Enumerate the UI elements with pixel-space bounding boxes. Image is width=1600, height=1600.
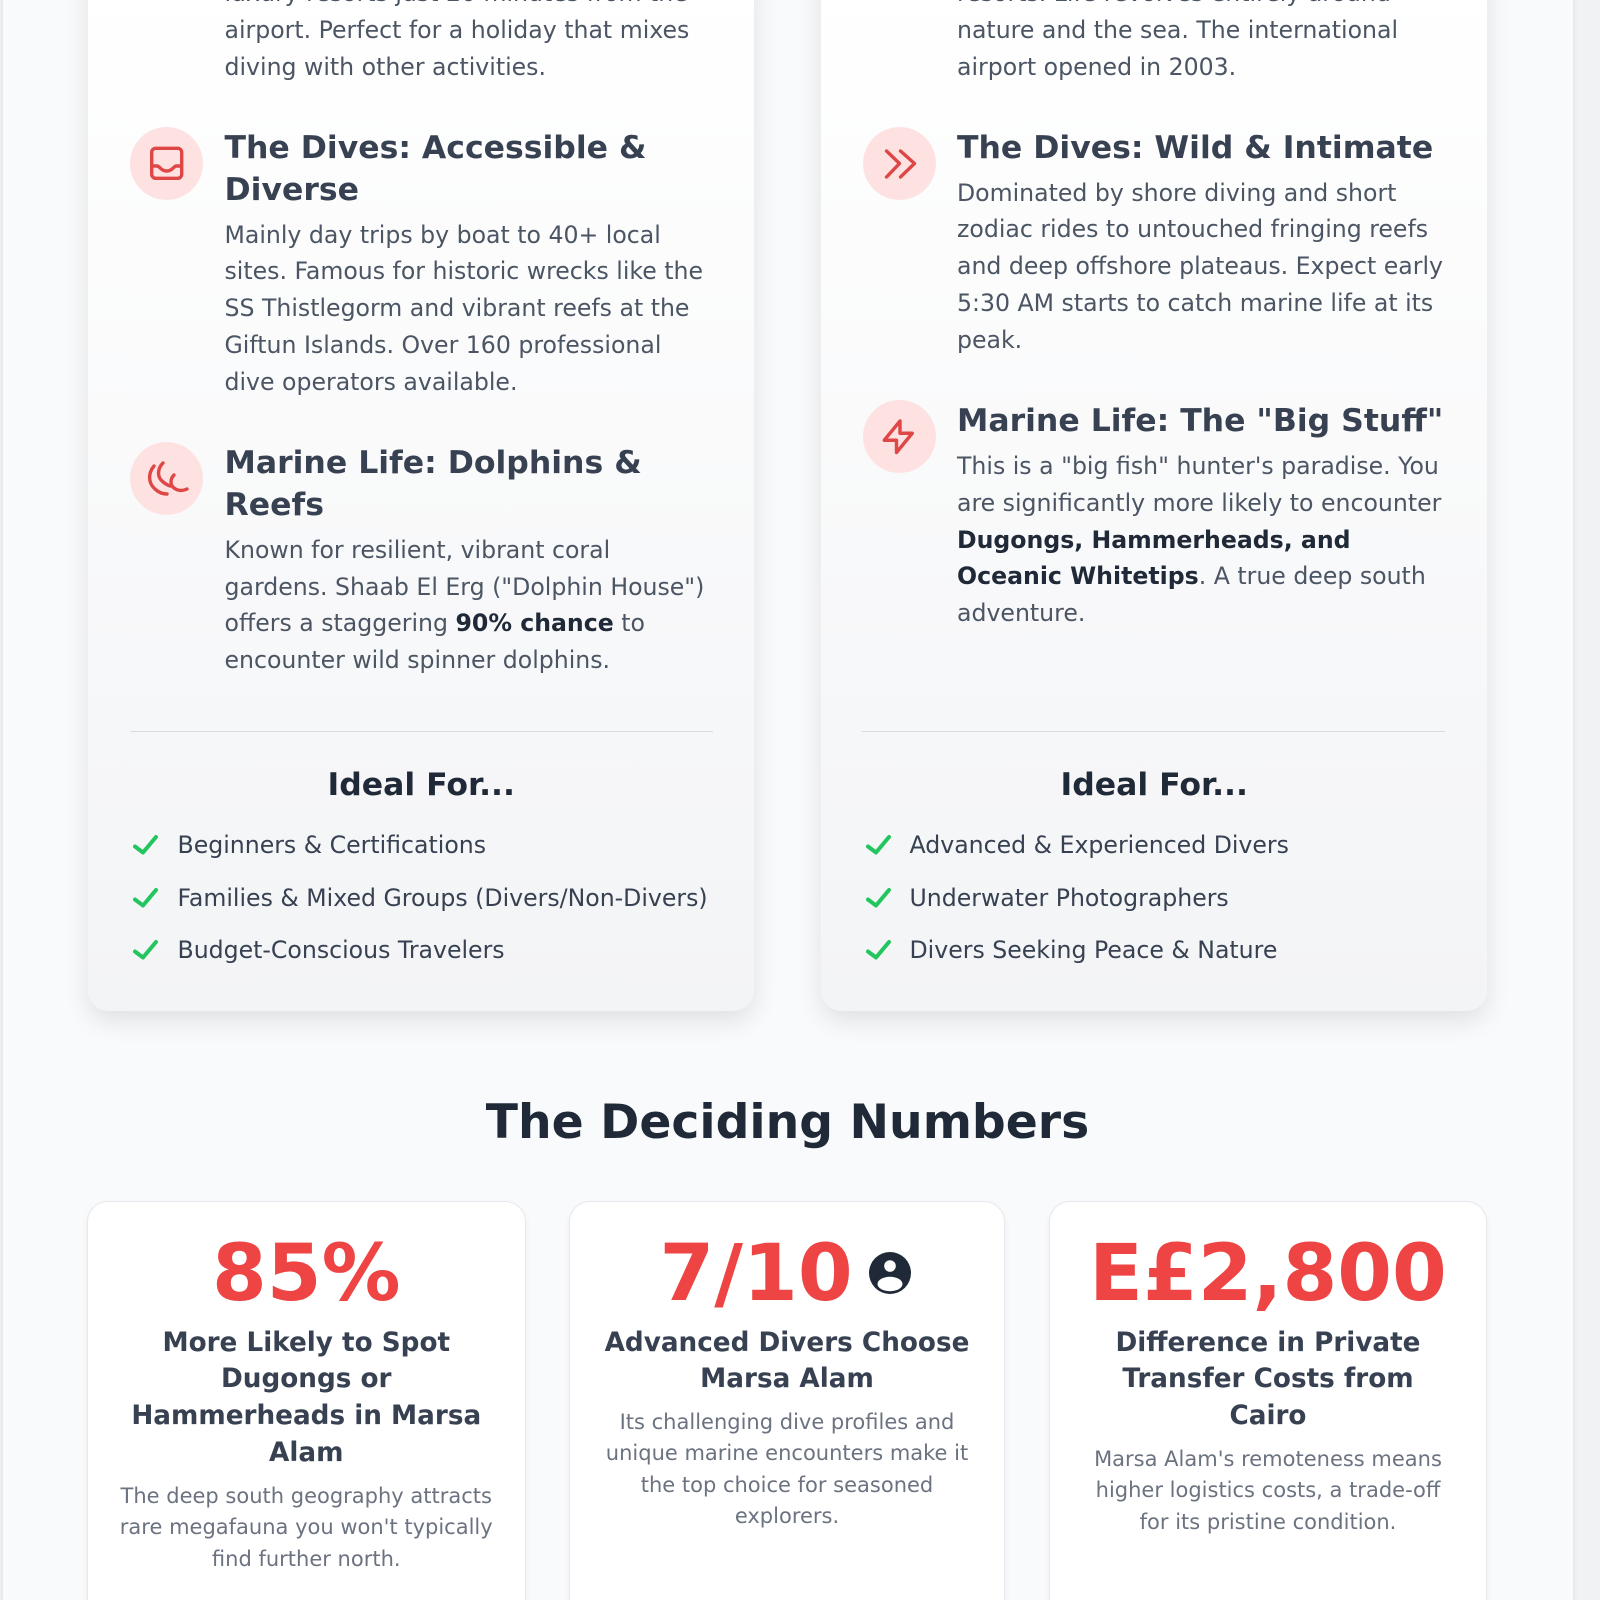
stat title: Advanced Divers Choose xyxy=(605,1328,969,1358)
panel: right destination card xyxy=(821,0,1487,1011)
heading: ideal for: Ideal For... xyxy=(328,766,515,802)
stat description: higher logistics costs, a trade-off xyxy=(1096,1478,1440,1502)
text: the dives description: sites. Famous for historic wrecks like the xyxy=(224,257,703,285)
stat description: The deep south geography attracts xyxy=(121,1484,492,1508)
stat title: Cairo xyxy=(1230,1401,1306,1431)
stat title: More Likely to Spot xyxy=(162,1328,450,1358)
checklist xyxy=(133,831,708,964)
text: intro paragraph end xyxy=(224,0,689,80)
checklist xyxy=(866,831,1289,964)
text: marine life description: encounter wild spinner dolphins. xyxy=(224,646,610,674)
stat description xyxy=(606,1410,968,1528)
stat title xyxy=(604,1328,969,1394)
stat description xyxy=(1094,1446,1442,1534)
text: intro paragraph end: airport. Perfect for a holiday that mixes xyxy=(224,16,689,44)
panel: left destination card xyxy=(88,0,754,1011)
stat description: Marsa Alam's remoteness means xyxy=(1094,1446,1442,1470)
heading: marine life: Reefs xyxy=(224,487,324,523)
text: marine life description: are significantly more likely to encounter xyxy=(957,489,1441,517)
check item: budget: Budget-Conscious Travelers xyxy=(178,936,505,964)
text: marine life description: offers a staggering 90% chance to xyxy=(224,609,645,637)
text: marine life description: Known for resilient, vibrant coral xyxy=(224,536,610,564)
stat description: unique marine encounters make it xyxy=(606,1441,968,1465)
stat description: explorers. xyxy=(735,1504,839,1528)
stat title xyxy=(1116,1328,1420,1431)
stat title: Marsa Alam xyxy=(700,1364,874,1394)
text: the dives description xyxy=(224,221,703,396)
text: marine life description: Oceanic Whitetips. A true deep south xyxy=(957,562,1426,590)
stat description: find further north. xyxy=(212,1546,401,1570)
icon: lightning bolt xyxy=(862,400,936,473)
check item: advanced: Advanced & Experienced Divers xyxy=(910,831,1289,859)
heading: marine life xyxy=(224,445,642,523)
text: intro paragraph end xyxy=(957,0,1398,80)
text: the dives description: zodiac rides to untouched fringing reefs xyxy=(957,215,1428,243)
heading: the dives: The Dives: Wild & Intimate xyxy=(957,130,1433,166)
text: intro paragraph end: airport opened in 2003. xyxy=(957,52,1236,80)
icon: person xyxy=(869,1252,911,1294)
divider xyxy=(130,731,713,732)
stat description xyxy=(120,1484,493,1570)
text: marine life description xyxy=(956,452,1442,627)
text: marine life description xyxy=(224,536,704,674)
text: marine life description: This is a "big fish" hunter's paradise. You xyxy=(957,452,1439,480)
stat title: Hammerheads in Marsa xyxy=(131,1401,481,1431)
stat title: Difference in Private xyxy=(1116,1328,1420,1358)
text: the dives description: Mainly day trips by boat to 40+ local xyxy=(224,221,661,249)
text: intro paragraph end: diving with other activities. xyxy=(224,52,546,80)
text: the dives description: 5:30 AM starts to catch marine life at its xyxy=(957,289,1433,317)
heading: marine life: Marine Life: The "Big Stuff" xyxy=(957,402,1443,438)
stat description: rare megafauna you won't typically xyxy=(120,1515,493,1539)
text: the dives description xyxy=(957,179,1443,354)
number: E£2,800 xyxy=(1089,1227,1447,1319)
stat description: the top choice for seasoned xyxy=(641,1472,933,1496)
heading: the deciding numbers: The Deciding Numbers xyxy=(486,1095,1089,1150)
text: the dives description: SS Thistlegorm and vibrant reefs at the xyxy=(224,294,689,322)
check item: peace: Divers Seeking Peace & Nature xyxy=(910,936,1277,964)
heading: the dives: The Dives: Accessible & xyxy=(224,130,646,166)
number with person icon: 7/10 xyxy=(660,1227,853,1319)
stat title: Dugongs or xyxy=(221,1364,392,1394)
text: the dives description: dive operators available. xyxy=(224,368,517,396)
panel: stat E£2,800 xyxy=(1049,1201,1487,1600)
number: 85% xyxy=(212,1227,400,1319)
icon: double chevron xyxy=(862,127,936,200)
panel: stat 7/10 xyxy=(569,1201,1005,1600)
heading: the dives xyxy=(224,130,646,208)
text: marine life description: gardens. Shaab El Erg ("Dolphin House") xyxy=(224,573,704,601)
panel: stat 85% xyxy=(87,1201,526,1600)
check item: photographers: Underwater Photographers xyxy=(910,884,1229,912)
stat title: Alam xyxy=(269,1438,343,1468)
stat title: Transfer Costs from xyxy=(1122,1364,1414,1394)
heading: marine life: Marine Life: Dolphins & xyxy=(224,445,642,481)
stat description: for its pristine condition. xyxy=(1140,1510,1396,1534)
heading: the dives: Diverse xyxy=(224,172,359,208)
icon: inbox tray xyxy=(130,127,203,200)
heading: ideal for: Ideal For... xyxy=(1060,766,1248,802)
check item: families: Families & Mixed Groups (Divers/Non-Divers) xyxy=(178,884,708,912)
text: marine life description: adventure. xyxy=(957,599,1085,627)
text: the dives description: Dominated by shore diving and short xyxy=(957,179,1396,207)
divider xyxy=(862,731,1445,732)
text: the dives description: peak. xyxy=(957,326,1022,354)
stat title xyxy=(131,1328,481,1468)
text: the dives description: and deep offshore plateaus. Expect early xyxy=(957,252,1443,280)
icon: dolphin waves xyxy=(130,442,203,515)
text: marine life description: Dugongs, Hammerheads, and xyxy=(957,526,1351,554)
text: the dives description: Giftun Islands. Over 160 professional xyxy=(224,331,661,359)
text: intro paragraph end: nature and the sea. The international xyxy=(957,16,1398,44)
stat description: Its challenging dive profiles and xyxy=(620,1410,954,1434)
check item: beginners: Beginners & Certifications xyxy=(178,831,486,859)
